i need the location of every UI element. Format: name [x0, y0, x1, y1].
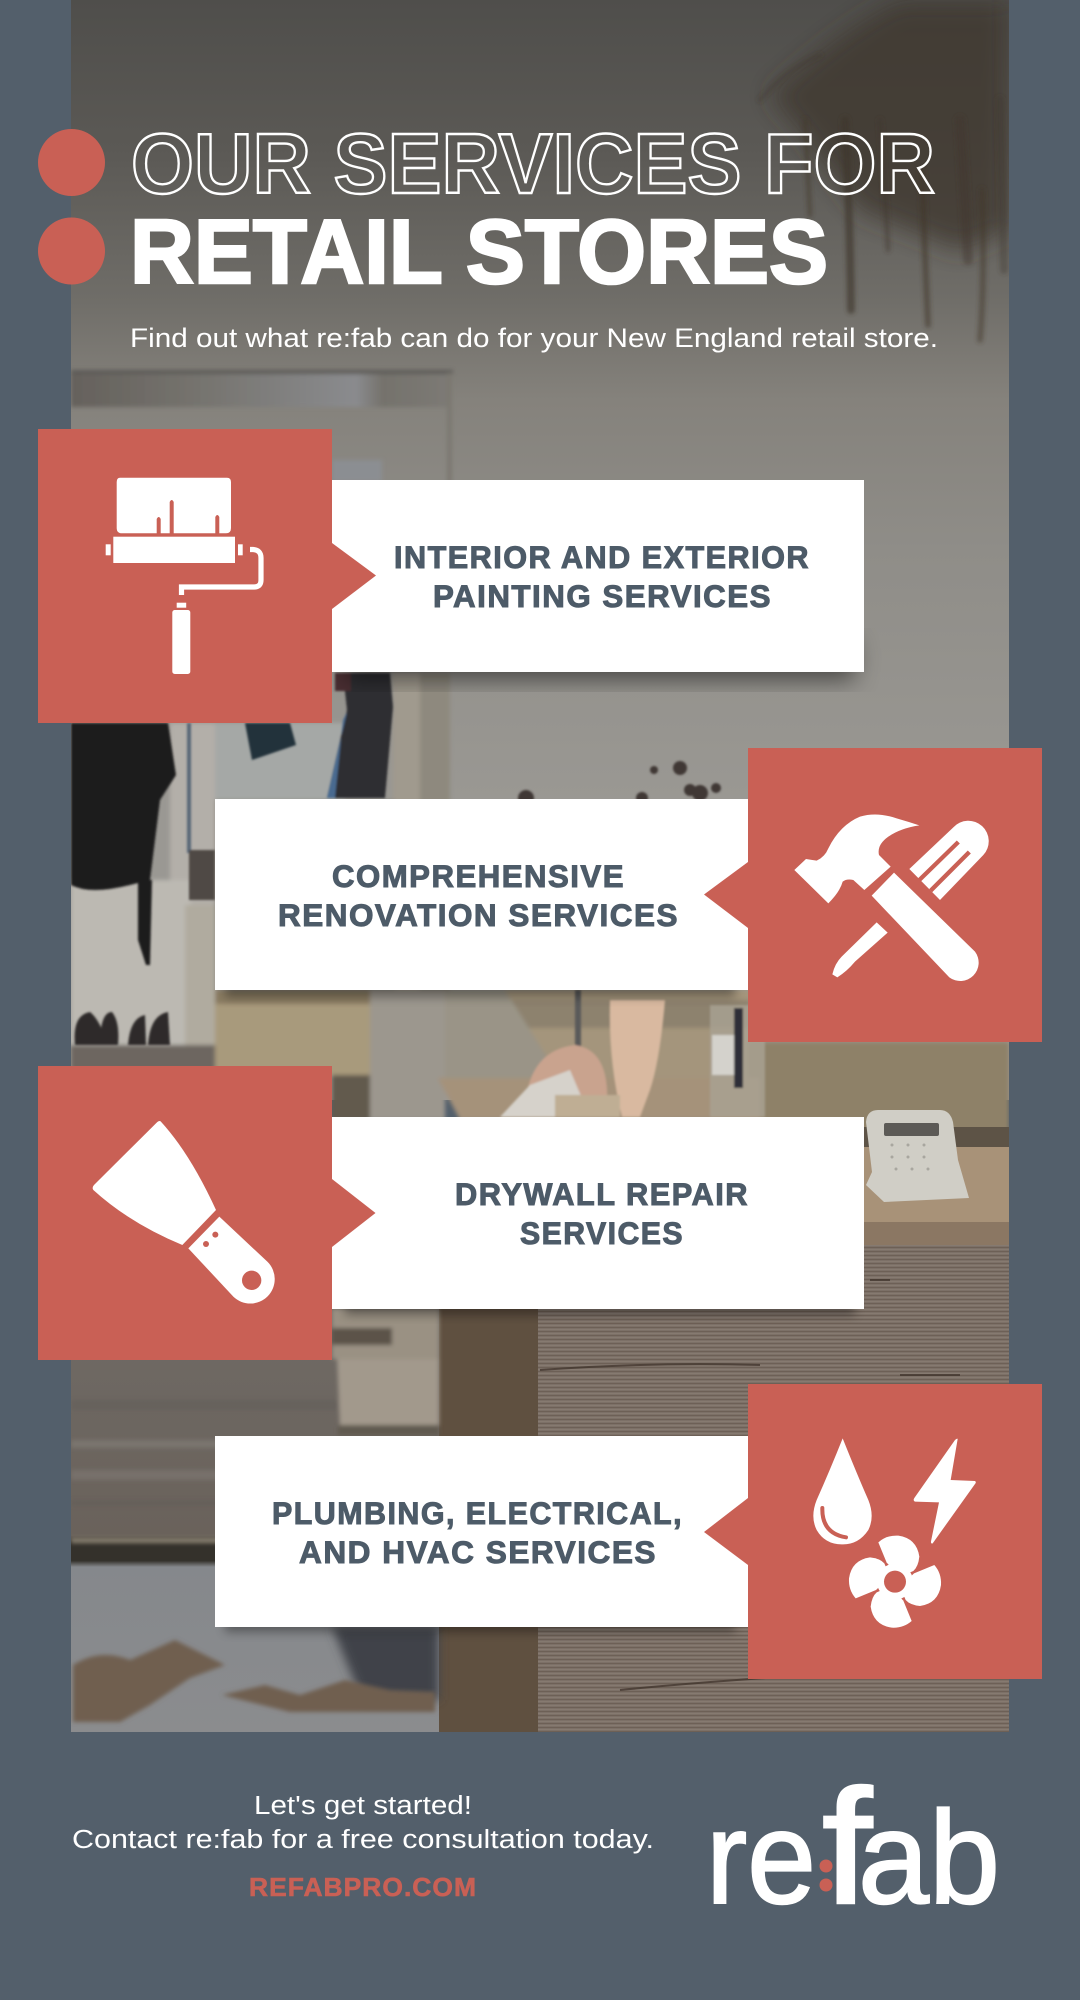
service card: comprehensive renovation — [215, 748, 1042, 1042]
dried flower stems on wall — [516, 760, 722, 799]
label — [455, 1176, 749, 1251]
service card: drywall repair — [38, 1066, 864, 1360]
product display items on table — [500, 990, 765, 1117]
label — [272, 1495, 683, 1570]
label: COMPREHENSIVE — [332, 858, 625, 894]
title: RETAIL STORES — [130, 202, 828, 303]
logo: re:fab: ab — [858, 1784, 1000, 1931]
wood counter — [864, 1127, 1009, 1149]
service card: interior and exterior painting — [38, 429, 864, 723]
label: SERVICES — [520, 1215, 684, 1251]
icon: paint roller — [106, 478, 261, 674]
title bullet circles — [38, 129, 105, 284]
label: AND HVAC SERVICES — [299, 1534, 657, 1570]
label: PLUMBING, ELECTRICAL, — [272, 1495, 683, 1531]
label: DRYWALL REPAIR — [455, 1176, 749, 1212]
icon: water drop, lightning bolt and fan — [813, 1438, 976, 1628]
icon: hammer and screwdriver — [794, 815, 989, 981]
floor — [71, 1309, 439, 1732]
label: RENOVATION SERVICES — [278, 897, 679, 933]
footer call to action: Contact re:fab for a free consultation today. — [72, 1826, 654, 1854]
coat rack and clothing — [71, 673, 393, 1045]
subtitle: Find out what re:fab can do for your New England retail store. — [130, 323, 938, 353]
icon: putty knife — [93, 1121, 275, 1304]
footer call to action: Let's get started! — [254, 1792, 472, 1820]
logo: re:fab — [706, 1755, 1000, 1938]
logo: re:fab: re — [706, 1784, 816, 1931]
service card: plumbing, electrical, HVAC — [215, 1384, 1042, 1679]
card reader on counter — [866, 1110, 969, 1202]
label — [278, 858, 679, 933]
title: OUR SERVICES FOR — [131, 117, 935, 212]
label — [394, 539, 810, 614]
label: INTERIOR AND EXTERIOR — [394, 539, 810, 575]
footer call to action — [72, 1792, 654, 1902]
title — [130, 117, 935, 303]
background photo of retail store — [71, 0, 1009, 1732]
hanging dried plant — [760, 0, 1009, 340]
logo: re:fab: f — [822, 1755, 873, 1938]
website link: REFABPRO.COM — [249, 1872, 477, 1902]
label: PAINTING SERVICES — [433, 578, 772, 614]
